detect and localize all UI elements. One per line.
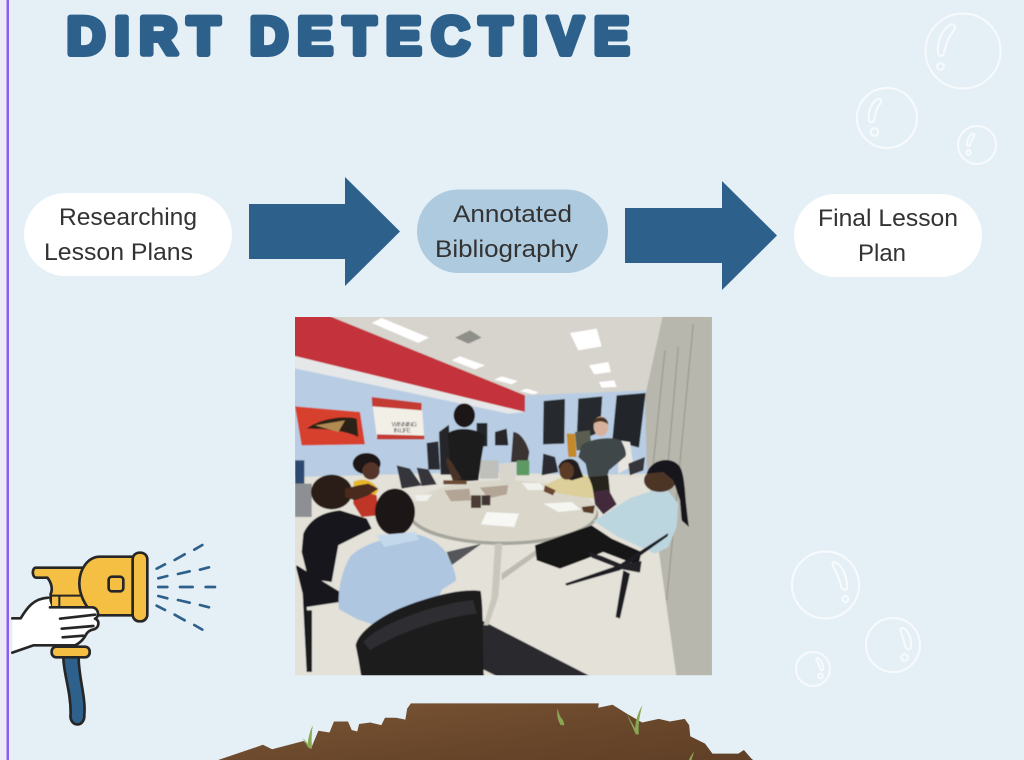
bubbles: bottom right <box>792 552 920 686</box>
step: Annotated Bibliography <box>417 190 608 273</box>
nozzle body <box>79 557 134 615</box>
photo: students around a table: WINNING <box>392 421 417 428</box>
nozzle cap <box>133 553 147 621</box>
photo: students around a table <box>292 314 715 679</box>
step: Final Lesson Plan: Plan <box>858 240 906 267</box>
step: Researching Lesson Plans <box>24 193 232 276</box>
nozzle window <box>109 577 123 591</box>
soil mound with grass <box>207 703 762 760</box>
step: Final Lesson Plan <box>794 194 982 277</box>
spray lines <box>157 545 215 630</box>
bubbles: top right <box>857 14 1000 164</box>
arrow 1 <box>249 177 400 286</box>
step: Final Lesson Plan: Final Lesson <box>818 205 958 232</box>
hand <box>12 598 98 653</box>
trigger detail <box>51 596 80 607</box>
step: Researching Lesson Plans: Lesson Plans <box>44 239 193 266</box>
hose collar <box>52 647 90 657</box>
photo: students around a table: IN LIFE <box>394 427 412 434</box>
hand outline <box>12 598 98 653</box>
title: DIRT DETECTIVE <box>67 7 629 66</box>
step: Researching Lesson Plans: Researching <box>59 204 197 231</box>
step: Annotated Bibliography: Annotated <box>453 201 572 228</box>
arrow 2 <box>625 181 777 290</box>
nozzle trigger <box>33 568 87 607</box>
step: Annotated Bibliography: Bibliography <box>435 236 578 263</box>
hose <box>63 657 85 724</box>
icon: hand holding spray nozzle <box>12 545 215 724</box>
